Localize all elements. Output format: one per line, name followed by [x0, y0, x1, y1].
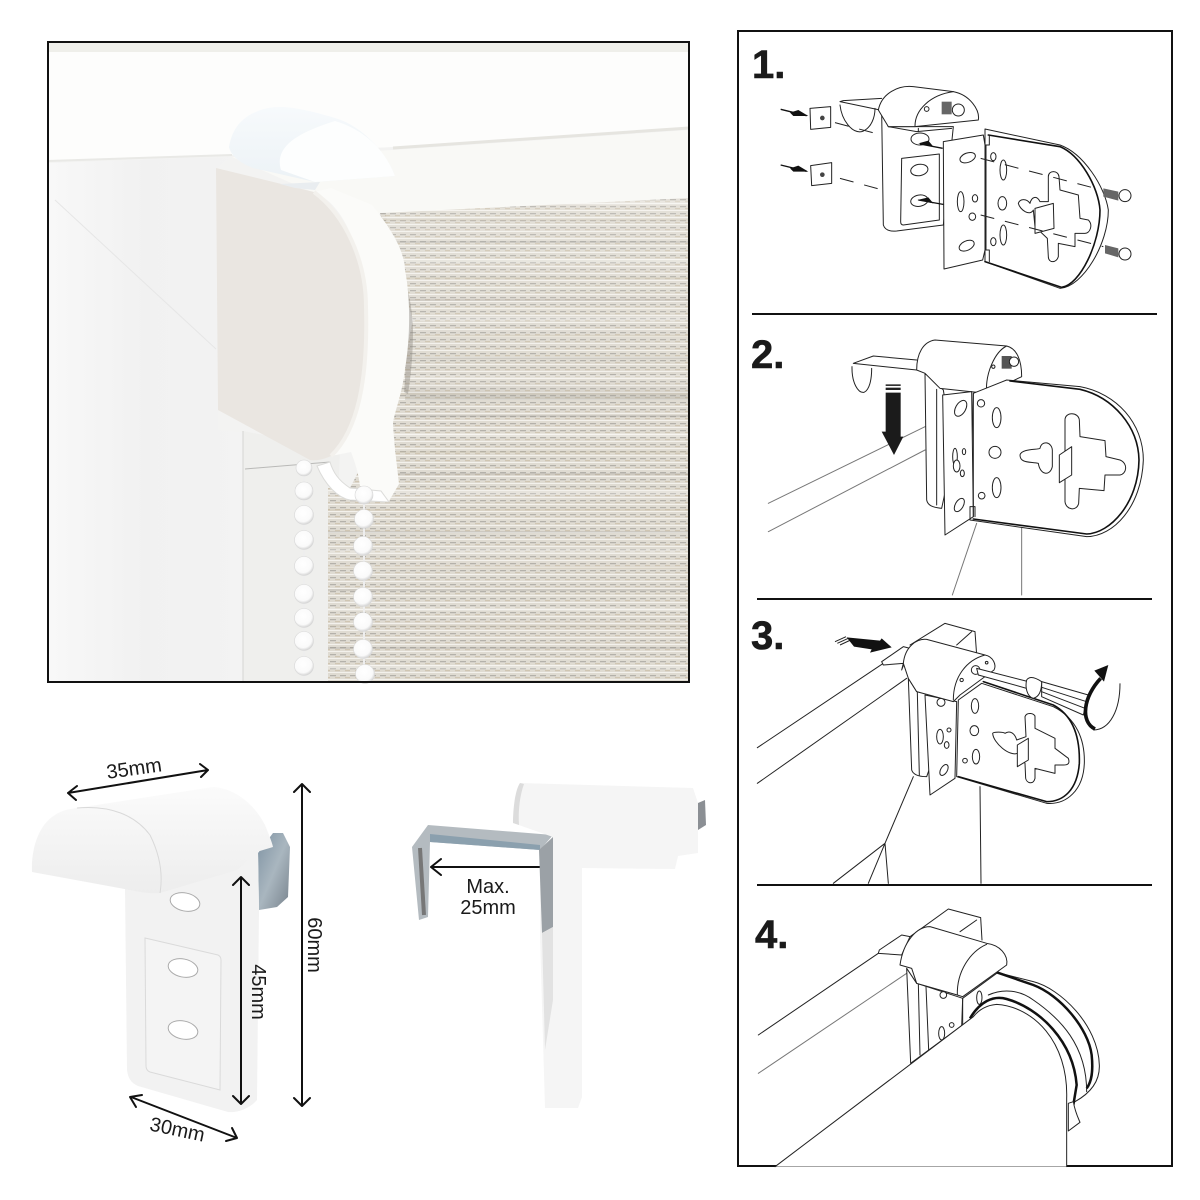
window soffit band	[48, 43, 689, 161]
dimension: 30mm: 30mm	[148, 1114, 207, 1147]
screwdriver	[977, 668, 1088, 715]
blind front	[775, 1004, 1067, 1167]
plate	[985, 129, 1108, 288]
panel: product photo of installed roller blind	[48, 42, 689, 684]
dimension: 60mm: 60mm	[303, 917, 325, 973]
bracket cap	[900, 927, 1007, 997]
nut plates	[810, 107, 832, 186]
label: Max. 25mm: 25mm	[460, 897, 516, 919]
bracket cap	[229, 107, 395, 182]
heading: step 3: 3.	[751, 614, 784, 658]
fabric blind	[328, 198, 689, 682]
bead chains	[294, 460, 374, 684]
small arrows	[781, 109, 947, 205]
dimension: 45mm: 45mm	[247, 964, 269, 1020]
diagram: step 2 hooking bracket on window frame	[768, 340, 1143, 595]
diagram: step 3 tightening with screwdriver	[757, 623, 1120, 883]
roller band	[997, 972, 1099, 1102]
slots	[166, 890, 202, 1042]
heading: step 4: 4.	[755, 913, 788, 957]
photo: bracket body	[125, 850, 259, 1112]
white roller band	[314, 188, 409, 501]
photo: metal clip behind bracket	[258, 833, 290, 910]
down arrow	[882, 384, 903, 455]
heading: step 1: 1.	[752, 43, 785, 87]
label: Max. 25mm: Max.	[466, 876, 510, 898]
rotation arrow	[1085, 665, 1120, 730]
plate	[970, 380, 1143, 537]
label: Max. 25mm	[460, 876, 516, 919]
left wall	[48, 157, 243, 682]
dimension: 30mm	[130, 1095, 237, 1147]
dimension: 35mm	[68, 754, 208, 800]
diagram: step 1 exploded bracket	[781, 86, 1131, 288]
lower pelmet band	[232, 130, 689, 214]
diagram: step 4 blind clipped in place	[758, 909, 1099, 1167]
dimension: 35mm: 35mm	[105, 754, 163, 784]
dimension: 45mm	[233, 877, 269, 1104]
pull hook	[317, 462, 389, 502]
panel: side view bracket with max 25mm	[412, 783, 706, 1108]
dimension arrow	[431, 859, 539, 875]
inner recess	[145, 938, 221, 1090]
panel: installation steps frame	[738, 31, 1172, 1167]
photo: screw tip	[698, 800, 706, 830]
heading: step 2: 2.	[751, 333, 784, 377]
window pillar	[243, 431, 340, 682]
screws	[1103, 188, 1131, 260]
photo: chrome hook	[412, 825, 553, 920]
dimension: 60mm	[294, 784, 325, 1106]
panel: bracket with dimensions	[32, 754, 325, 1147]
end cover	[216, 168, 366, 460]
push arrow	[835, 637, 892, 653]
photo: bracket cap	[32, 787, 273, 893]
photo: white T bracket	[513, 783, 698, 1108]
